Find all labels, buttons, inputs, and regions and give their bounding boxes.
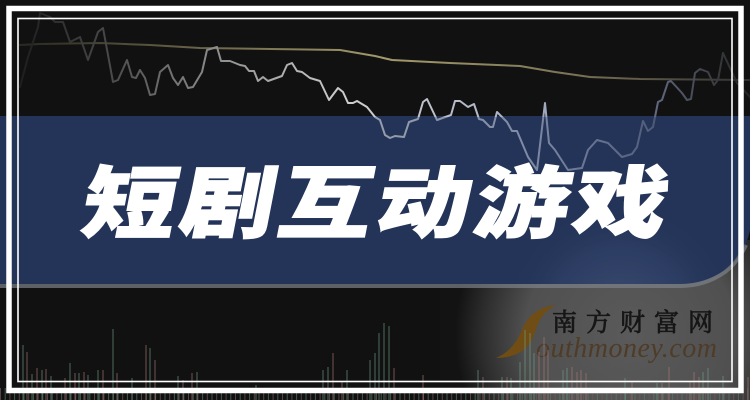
pink volume bars [27, 337, 748, 400]
background glow behind watermark [440, 240, 750, 400]
small base bars [0, 388, 750, 400]
blue title band [0, 116, 750, 286]
moving average line [20, 43, 750, 80]
title: 短剧互动游戏 [75, 161, 676, 248]
watermark url: outhmoney.com [536, 333, 717, 364]
price line chart [20, 13, 750, 170]
band tint over chart line [0, 117, 750, 284]
icon: swoosh S [496, 305, 556, 358]
green volume bars [23, 323, 723, 400]
price line [20, 13, 750, 170]
watermark chinese name: 南方财富网 [552, 303, 722, 339]
watermark: southmoney logo [496, 303, 722, 364]
volume bars [0, 323, 750, 400]
